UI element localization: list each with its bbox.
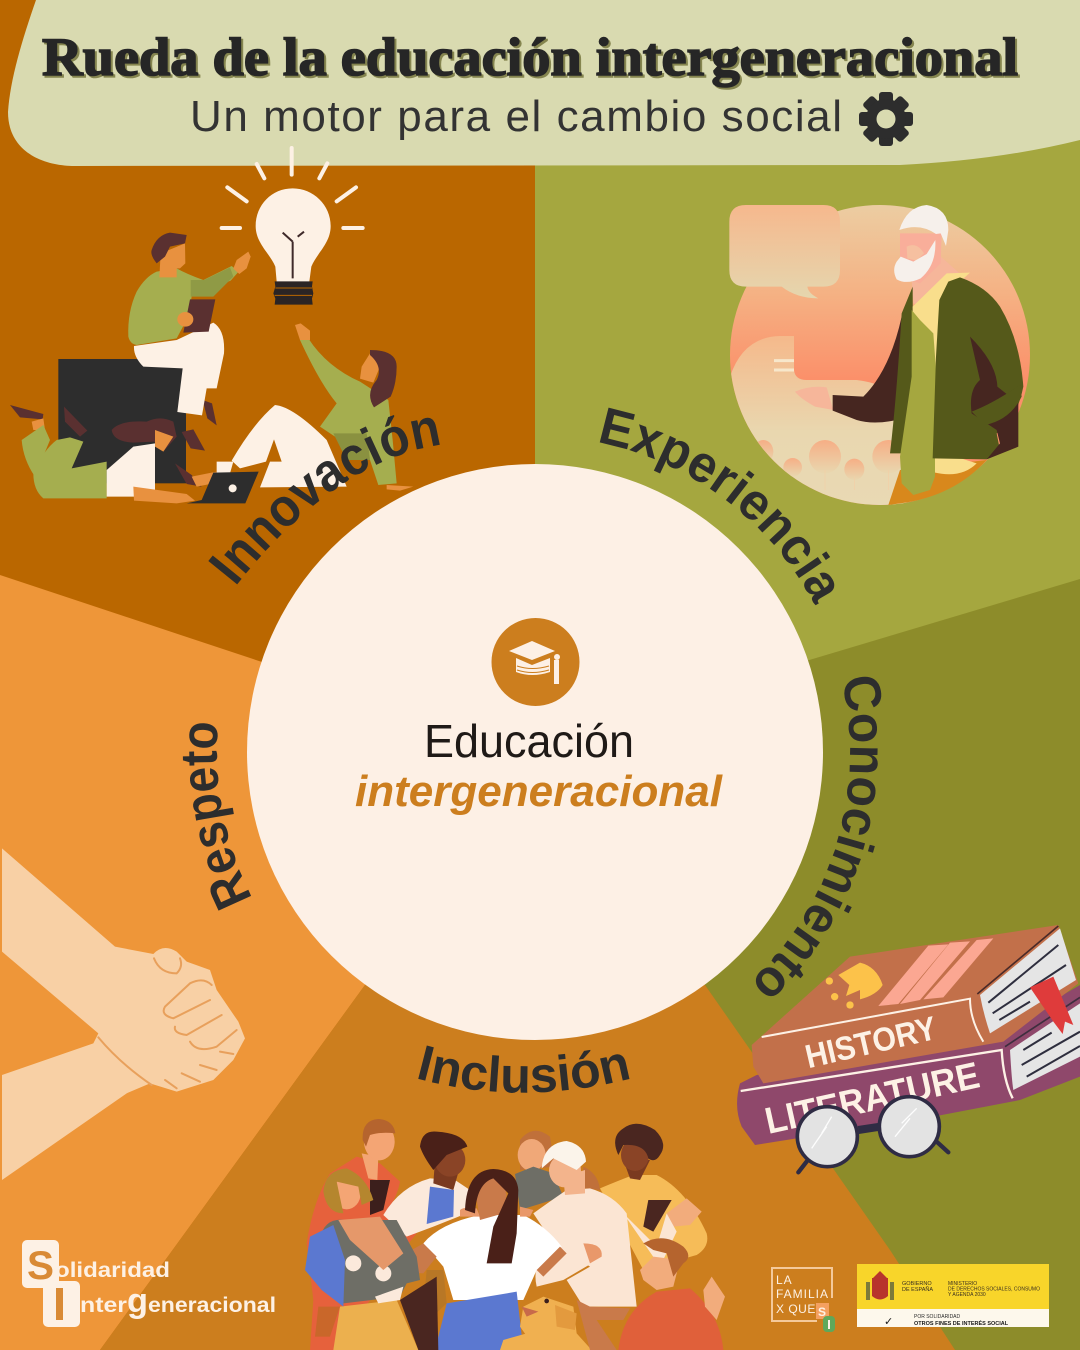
logo: Gobierno de España: ✓ [884, 1315, 893, 1328]
person: woman lying with laptop [10, 405, 217, 503]
person: back man [307, 1119, 417, 1350]
logo: Solidaridad Intergeneracional: nter [80, 1294, 127, 1317]
person: older man with sweater [533, 1141, 677, 1307]
center label: intergeneracional [355, 767, 723, 816]
sector: Innovación background [0, 0, 540, 700]
logo: Gobierno de España: GOBIERNO [902, 1281, 932, 1287]
logo: Solidaridad Intergeneracional: olidaridad [55, 1259, 170, 1282]
illustration: Innovación team around a lightbulb [10, 148, 413, 503]
curved label: Experiencia: Experiencia [600, 408, 834, 606]
hill and trees [730, 336, 907, 510]
person: woman with red hair behind [515, 1131, 600, 1210]
logo: Solidaridad Intergeneracional: S [27, 1244, 54, 1288]
illustration: elderly man in circle scene [729, 205, 1030, 510]
illustration: stacked books and glasses [737, 925, 1080, 1172]
person: woman reaching up [217, 323, 413, 491]
logo: Gobierno de España: DE ESPAÑA [902, 1286, 933, 1293]
logo: La Familia x que sí: FAMILIA [776, 1287, 829, 1301]
illustration: clasped hands [2, 848, 245, 1180]
book: Literature [737, 985, 1080, 1145]
title: Rueda de la educación intergeneracional [42, 27, 1018, 87]
logo: La Familia x que sí: LA [776, 1273, 793, 1287]
sector: Inclusión background [100, 752, 955, 1350]
pet: dog [500, 1297, 592, 1350]
scene background [730, 205, 1030, 505]
person: woman with polka sweater [305, 1168, 438, 1350]
person: woman with curly hair [600, 1124, 707, 1270]
sector: Respeto background [0, 575, 535, 1350]
header banner [8, 0, 1080, 166]
title: Rueda de la educación intergeneracional [44, 29, 1020, 89]
person: seated man [128, 233, 251, 451]
center circle [247, 464, 823, 1040]
logo: Solidaridad Intergeneracional: eneracional [148, 1294, 276, 1317]
speech bubble [729, 205, 840, 298]
logo: Solidaridad Intergeneracional [22, 1240, 276, 1327]
person: woman with bun [383, 1132, 470, 1237]
icon: laptop [187, 472, 259, 503]
icon: glasses [797, 1097, 948, 1172]
center label: Educación [424, 715, 634, 767]
book: History [752, 925, 1078, 1083]
book: History: HISTORY [802, 1010, 940, 1076]
person: center woman [400, 1169, 567, 1350]
block [58, 359, 186, 483]
curved label: Respeto: Respeto [182, 723, 251, 911]
logo: La Familia x que sí [772, 1268, 835, 1332]
logo: Gobierno de España: POR SOLIDARIDAD [914, 1314, 961, 1320]
curved label: Inclusión: Inclusión [418, 1046, 630, 1093]
logo: Gobierno de España [857, 1264, 1049, 1328]
icon: graduation cap [492, 618, 580, 706]
logo: Gobierno de España: OTROS FINES DE INTERÉS SOCIAL [914, 1319, 1009, 1327]
logo: Gobierno de España: MINISTERIO [948, 1281, 977, 1287]
icon: lightbulb [256, 188, 331, 305]
icon: gear [859, 92, 913, 146]
curved label: Conocimiento: Conocimiento [756, 676, 882, 996]
logo: Solidaridad Intergeneracional: g [127, 1282, 148, 1320]
sector: Conocimiento background [600, 579, 1080, 1350]
center label [355, 715, 723, 816]
logo: Gobierno de España: DE DERECHOS SOCIALES, CONSUMO [948, 1286, 1040, 1292]
logo: La Familia x que sí: X QUE [776, 1302, 816, 1316]
finger lines [98, 958, 237, 1088]
illustration: diverse group of people [305, 1119, 725, 1350]
icon: lightbulb rays [222, 148, 363, 228]
book: Literature: LITERATURE [761, 1054, 983, 1142]
sector: Experiencia background [535, 130, 1080, 700]
logo: La Familia x que sí: S [818, 1305, 826, 1319]
person: boy in red shirt [577, 1238, 725, 1350]
elderly man figure [833, 205, 1023, 505]
curved label: Innovación: Innovación [208, 415, 440, 584]
logo: Gobierno de España: Y AGENDA 2030 [948, 1292, 986, 1298]
subtitle: Un motor para el cambio social [190, 92, 842, 141]
